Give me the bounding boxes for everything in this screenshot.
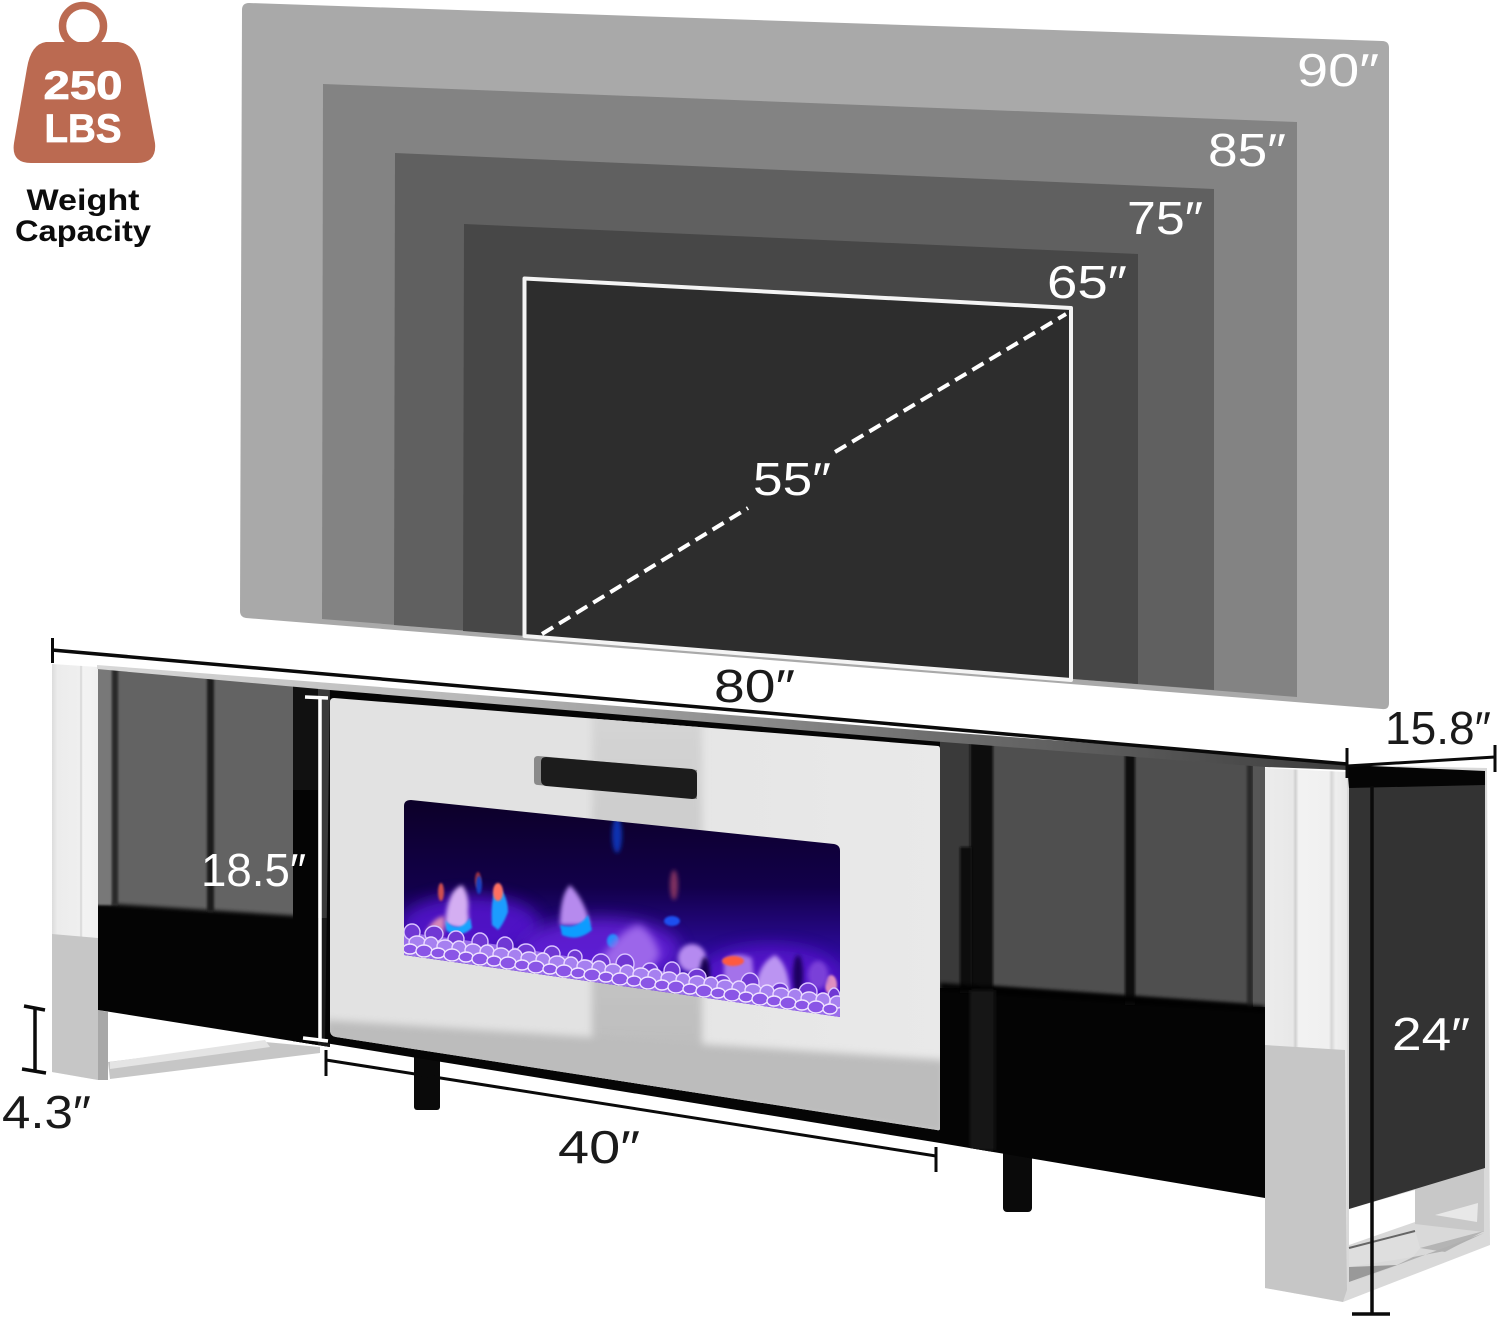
- side panel: 24″: [1392, 1008, 1470, 1060]
- dimension: 80 inch width: [52, 638, 1347, 764]
- dimension: 80 inch width: 80″: [714, 660, 795, 712]
- heading: weight capacity: Capacity: [15, 215, 151, 248]
- fireplace panel: [325, 690, 945, 1135]
- panel: 85 inch TV size: 85″: [1208, 124, 1286, 176]
- panel: 55 inch TV size with diagonal: 55″: [753, 453, 831, 505]
- icon: 250 lbs weight capacity: 250: [44, 64, 122, 108]
- dimension: 18.5 inch opening height: [201, 696, 328, 1041]
- dimension: 40 inch fireplace width: 40″: [558, 1121, 640, 1173]
- icon: 250 lbs weight capacity: LBS: [44, 107, 122, 151]
- dimension: 18.5 inch opening height: 18.5″: [201, 844, 306, 896]
- TV stand: [52, 660, 1490, 1302]
- dimension: 4.3 inch clearance: 4.3″: [2, 1086, 91, 1138]
- right door: [936, 730, 1265, 1210]
- panel: 55 inch TV size with diagonal: [524, 278, 1071, 680]
- heading: weight capacity: Weight: [26, 184, 140, 217]
- panel: 65 inch TV size: 65″: [1047, 256, 1127, 308]
- dimension: 15.8 inch depth: [1347, 702, 1495, 778]
- fireplace black surround: [325, 686, 940, 1143]
- fireplace flames: [400, 800, 844, 1017]
- dimension: 15.8 inch depth: 15.8″: [1385, 702, 1491, 754]
- panel: 75 inch TV size: [394, 153, 1214, 690]
- right leg and side frame: [1265, 765, 1490, 1302]
- icon: 250 lbs weight capacity: [14, 6, 155, 163]
- support feet: [414, 1050, 1032, 1212]
- left leg frame: [52, 664, 320, 1080]
- left door: [96, 660, 330, 1060]
- panel: 65 inch TV size: [463, 224, 1138, 684]
- side panel: [1347, 765, 1485, 1209]
- panel: 75 inch TV size: 75″: [1127, 192, 1203, 244]
- glowing stone bed: [403, 924, 844, 1017]
- speaker grille: [534, 756, 697, 799]
- top edge of stand: [97, 665, 1347, 770]
- panel: 90 inch TV size: 90″: [1297, 44, 1379, 96]
- dimension: 24 inch height: [1352, 786, 1390, 1314]
- dimension: 40 inch fireplace width: [326, 1050, 936, 1173]
- dimension: 4.3 inch clearance: [2, 1006, 91, 1138]
- heading: weight capacity: [15, 184, 151, 248]
